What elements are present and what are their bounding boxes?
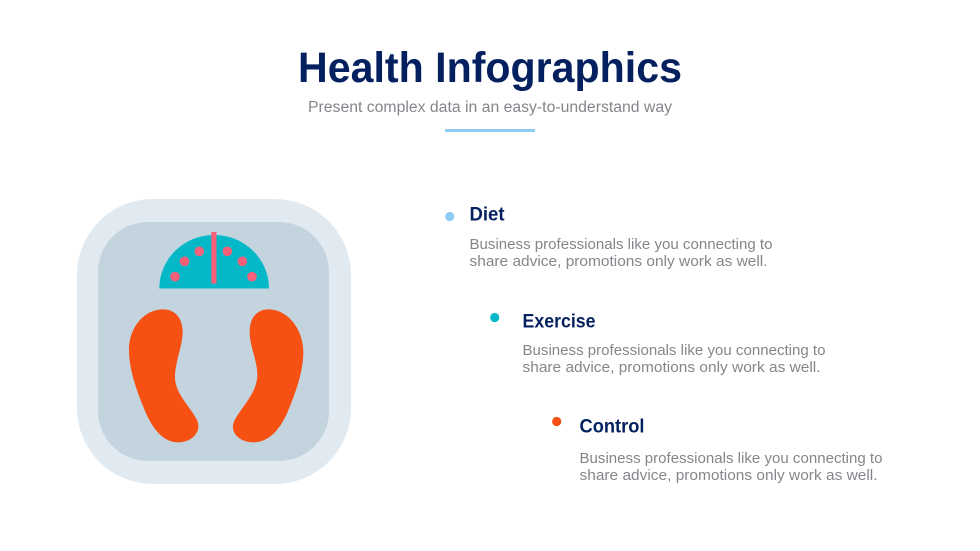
- bullet: orange: [552, 417, 561, 426]
- item: Exercise: [490, 312, 826, 376]
- subtitle: Present complex data in an easy-to-understand way: [308, 99, 672, 116]
- right footprint: [233, 309, 303, 442]
- left footprint: [129, 309, 198, 442]
- title: Health Infographics: [298, 44, 682, 92]
- item: Diet: [445, 204, 772, 270]
- scale dial: [159, 232, 269, 288]
- description: Diet: Business professionals like you connecting to: [470, 236, 772, 253]
- description: Exercise: share advice, promotions only work as well.: [522, 359, 820, 376]
- description: Control: Business professionals like you connecting to: [580, 450, 882, 467]
- heading: Control: Control: [580, 416, 644, 438]
- heading: Exercise: Exercise: [522, 312, 596, 332]
- bullet: light blue: [445, 212, 454, 221]
- heading: Diet: Diet: [470, 204, 505, 226]
- description: Control: share advice, promotions only work as well.: [580, 467, 878, 484]
- item: Control: [552, 416, 882, 484]
- description: Exercise: Business professionals like you connecting to: [522, 342, 826, 359]
- icon: weighing scale: [77, 199, 351, 484]
- scale inner platform: [98, 222, 329, 461]
- bullet: teal: [490, 313, 499, 322]
- description: Diet: share advice, promotions only work as well.: [470, 253, 768, 270]
- title underline: [445, 129, 535, 132]
- scale outer body: [77, 199, 351, 484]
